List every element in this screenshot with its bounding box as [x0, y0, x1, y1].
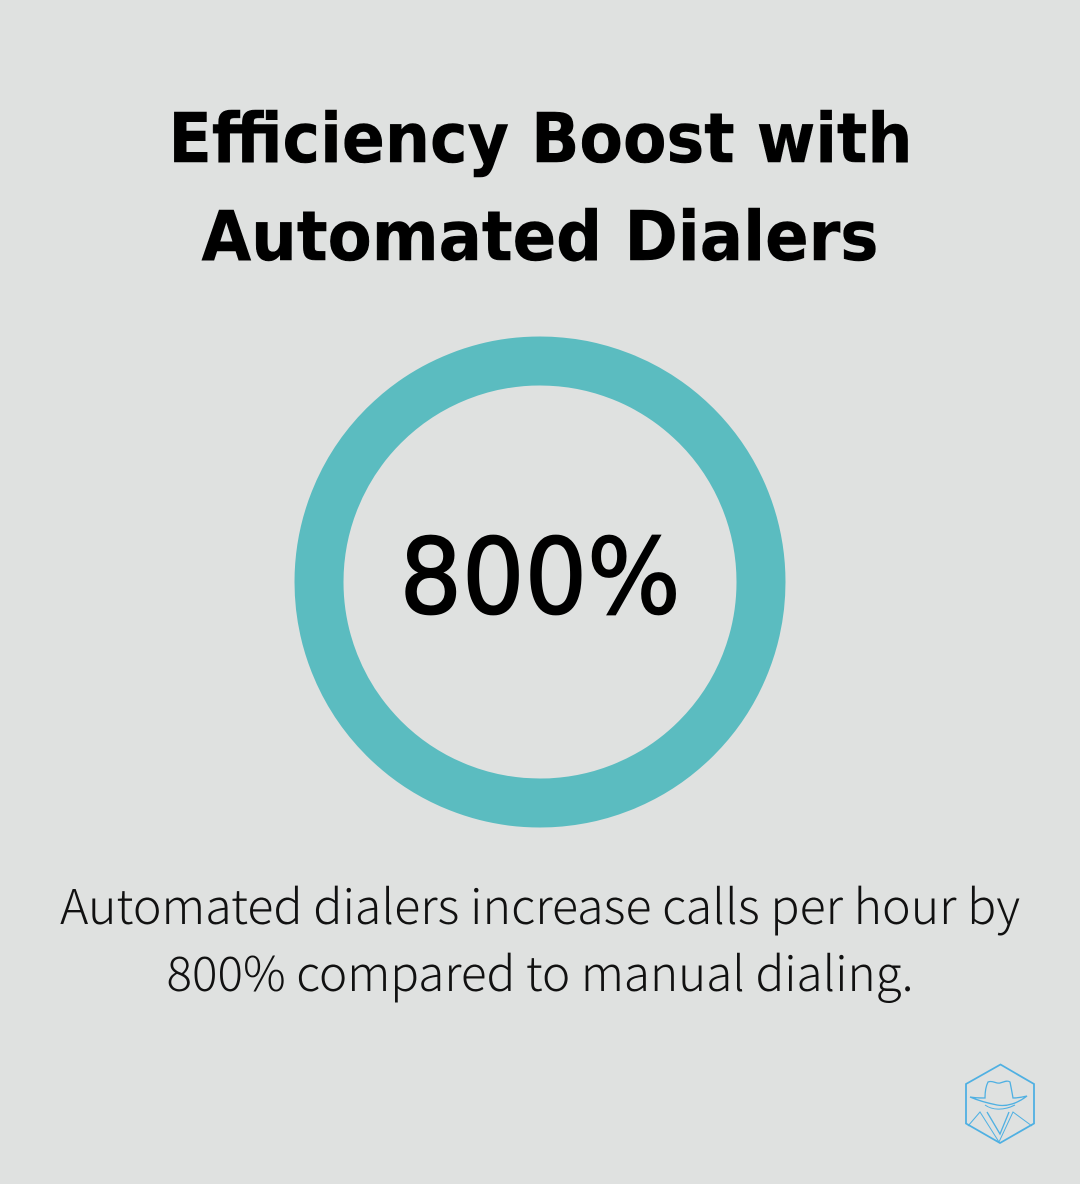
- description text: Automated dialers increase calls per hour by: [60, 868, 1020, 938]
- donut ring: [319, 361, 761, 803]
- title: [168, 99, 912, 277]
- big number: 800%: 800%: [400, 516, 680, 638]
- title: Efficiency Boost with: [168, 99, 912, 179]
- description text: [60, 868, 1020, 1005]
- icon: logo spy in hexagon: [966, 1064, 1034, 1143]
- description text: 800% compared to manual dialing.: [166, 935, 914, 1005]
- title: Automated Dialers: [202, 197, 878, 277]
